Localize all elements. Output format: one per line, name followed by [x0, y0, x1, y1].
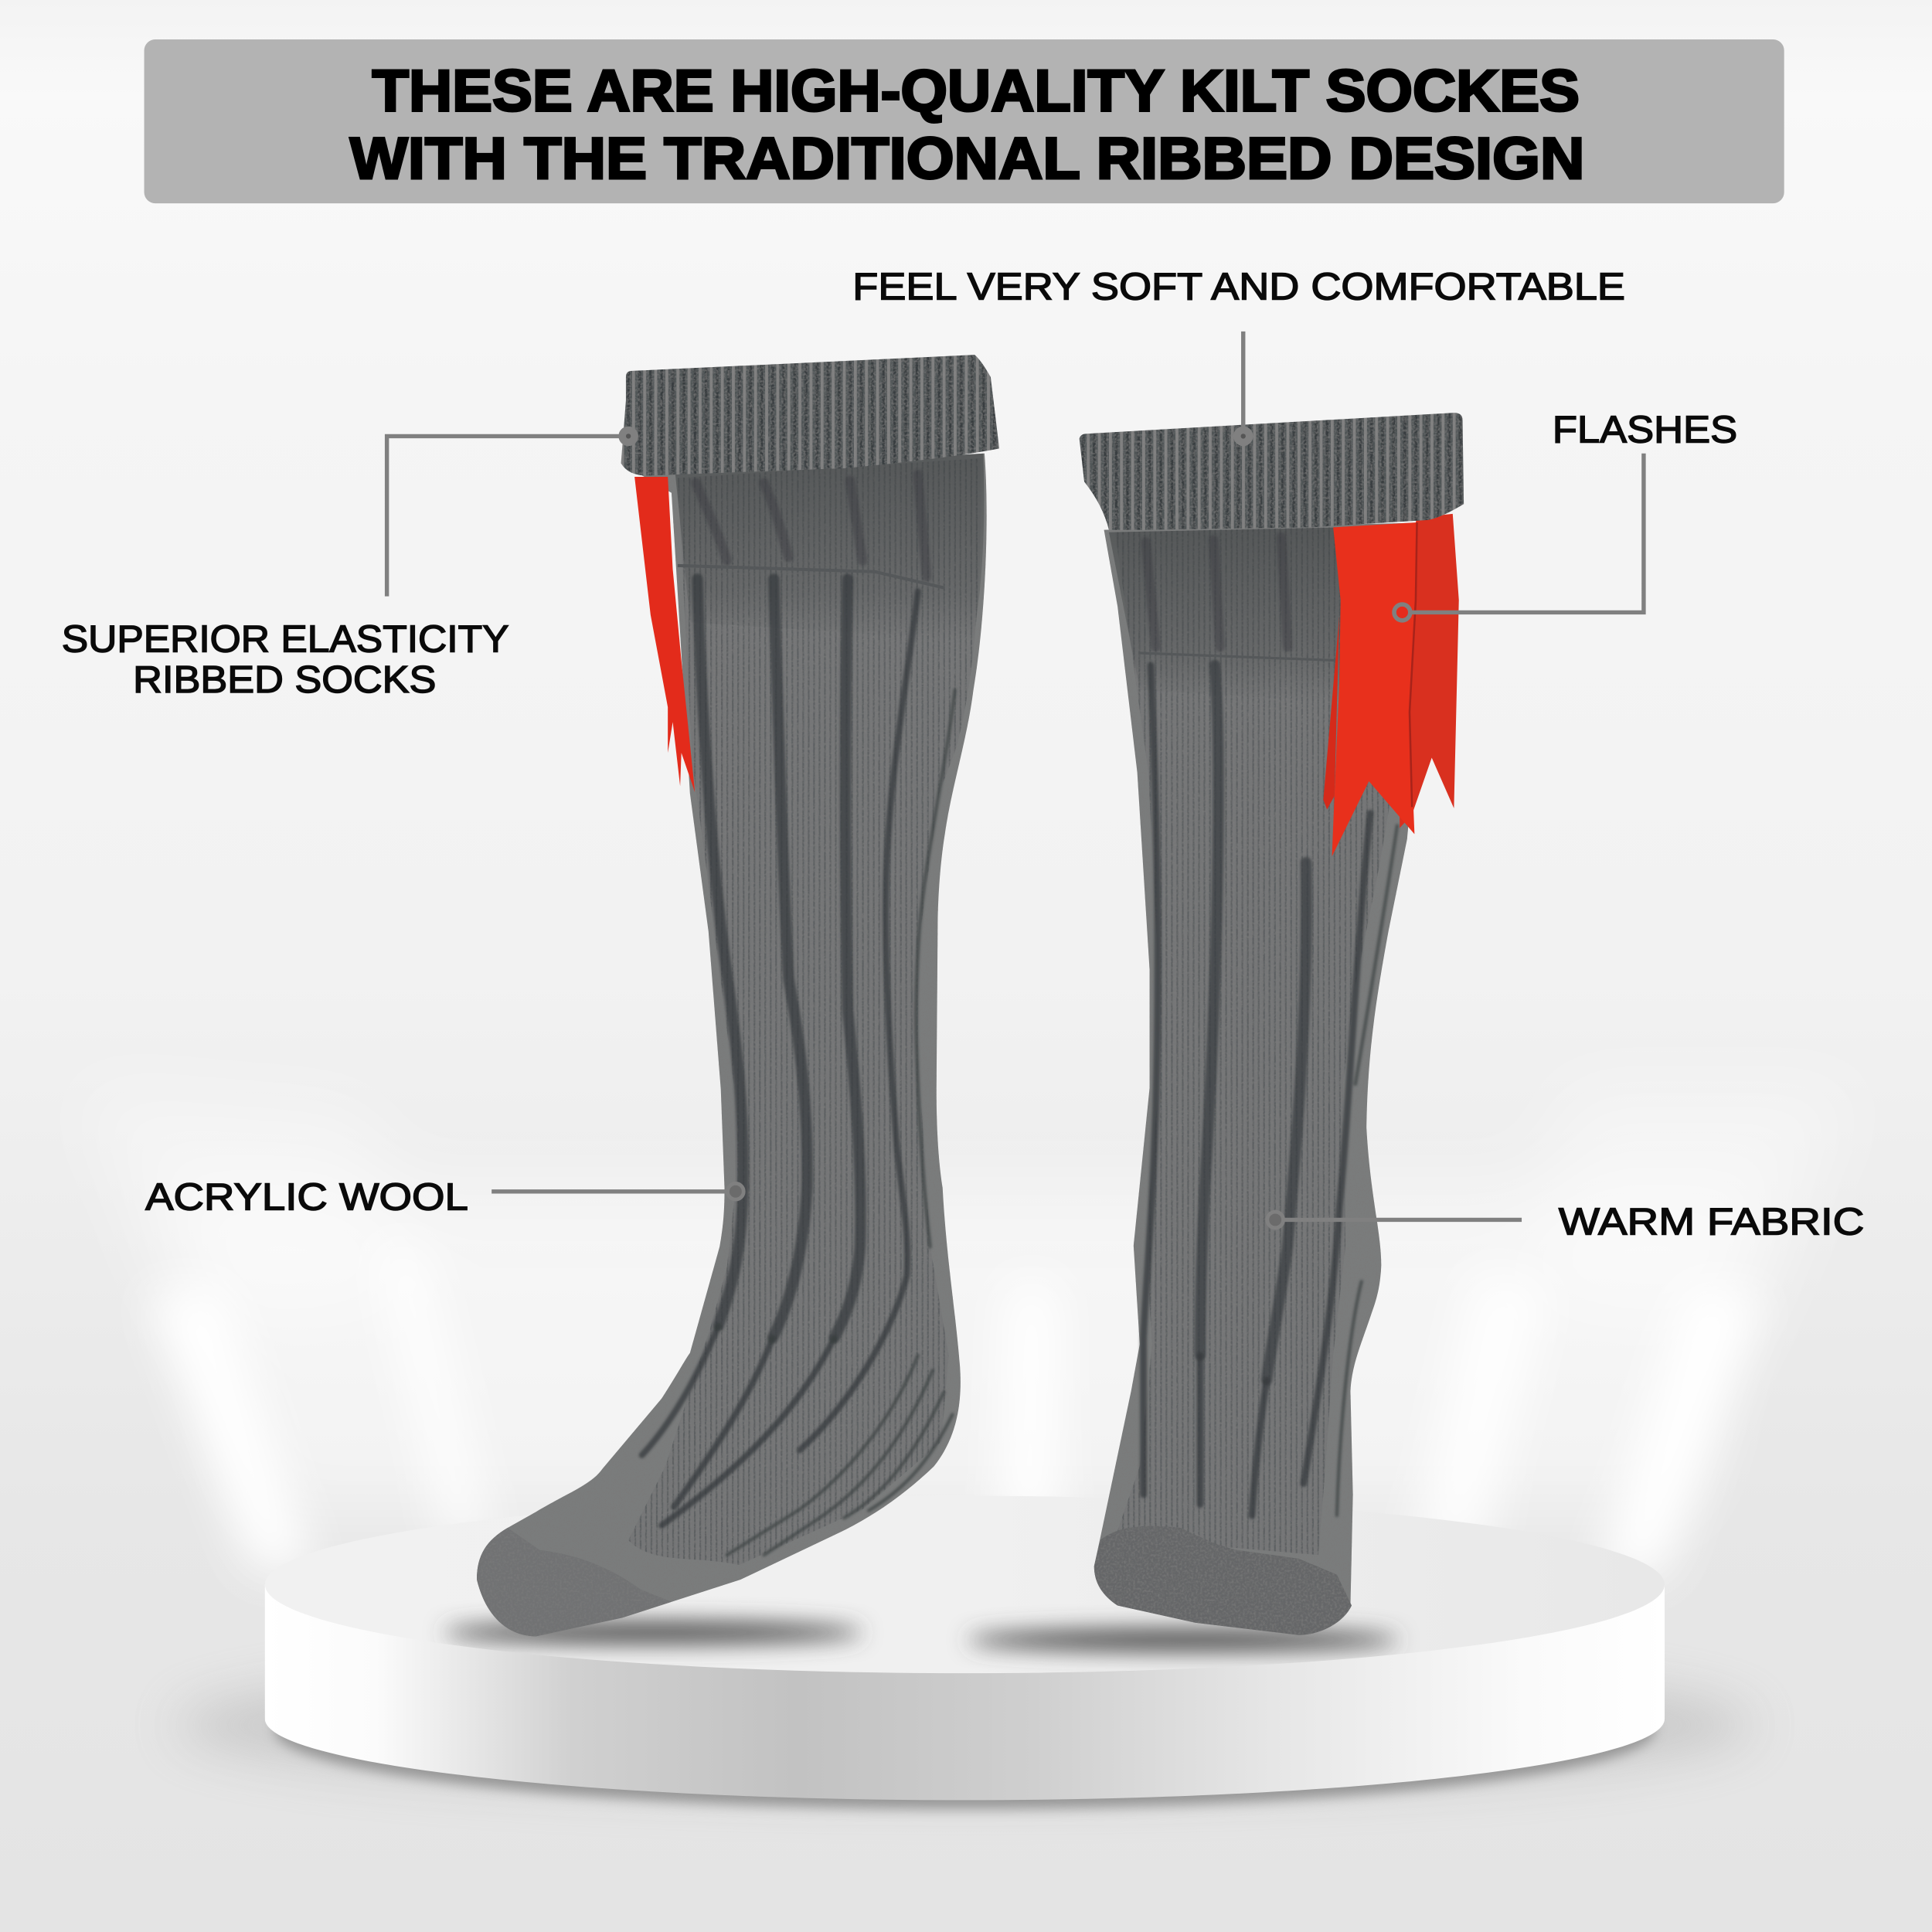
callout: acrylic wool: [145, 1176, 743, 1219]
callout: superior elasticity: [62, 427, 638, 701]
callout: flashes: [1394, 408, 1737, 621]
right flash left sliver: [1323, 616, 1339, 810]
callout: acrylic wool: ACRYLIC WOOL: [145, 1176, 468, 1219]
callout: warm fabric: [1267, 1201, 1864, 1243]
right back flash ribbon: [1399, 514, 1459, 828]
right sock fold edge: [1140, 653, 1337, 661]
podium: [265, 1496, 1665, 1800]
callout: warm fabric: WARM FABRIC: [1559, 1201, 1864, 1243]
left sock leg and foot: [477, 454, 987, 1636]
left sock: [477, 355, 999, 1636]
callout: superior elasticity: RIBBED SOCKS: [133, 658, 436, 701]
right sock ribbed panel: [1115, 525, 1429, 1555]
callout: flashes: FLASHES: [1553, 408, 1737, 451]
callout: feel very soft: FEEL VERY SOFT AND COMFORTABLE: [852, 265, 1625, 308]
left sock ribbed panel: [628, 458, 981, 1565]
callout: feel very soft: [852, 265, 1625, 446]
right sock leg and foot: [1094, 522, 1435, 1635]
right sock upper fold shade: [1109, 527, 1343, 702]
left sock upper fold shade: [675, 454, 984, 641]
left flash ribbon: [634, 477, 695, 792]
header title: [350, 58, 1584, 192]
header banner: [145, 39, 1784, 203]
left sock toe: [477, 1528, 672, 1636]
left sock fold edge: [678, 566, 944, 588]
right sock toe: [1094, 1526, 1352, 1635]
right sock cuff: [1080, 413, 1464, 530]
left sock cuff: [621, 355, 999, 475]
left sock rib lines: [642, 474, 955, 1555]
right sock: [1080, 413, 1464, 1635]
header title: WITH THE TRADITIONAL RIBBED DESIGN: [350, 126, 1584, 192]
header title: THESE ARE HIGH-QUALITY KILT SOCKES: [372, 58, 1580, 124]
right flash fold line: [1410, 522, 1417, 807]
callout: superior elasticity: SUPERIOR ELASTICITY: [62, 617, 509, 660]
right sock rib lines: [1144, 537, 1397, 1515]
right front flash ribbon: [1332, 522, 1417, 856]
